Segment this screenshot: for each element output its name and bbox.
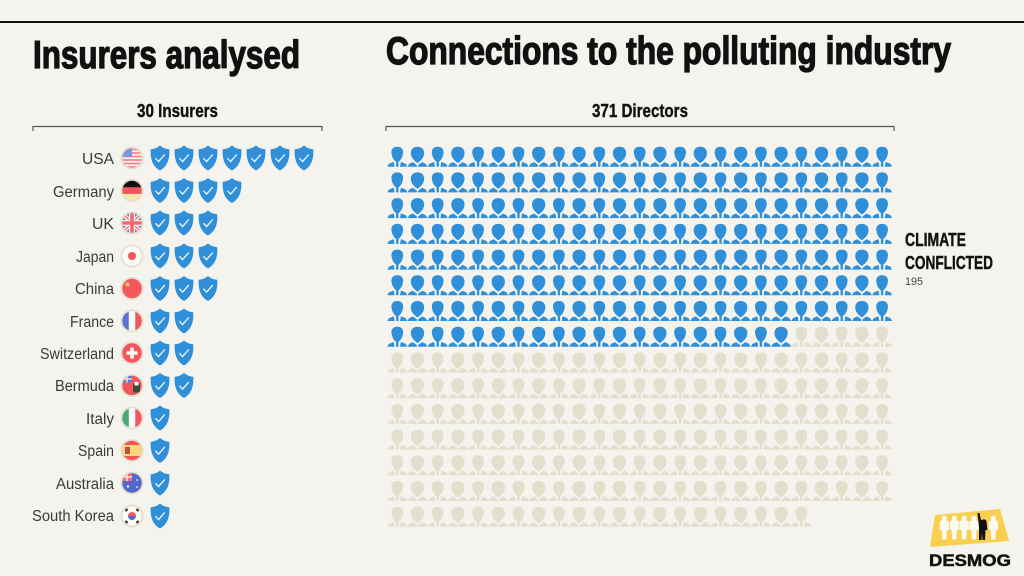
logo: Desmog [929,509,1011,570]
row: Germany [53,178,241,203]
heading: insurers analysed: Insurers analysed [33,34,300,77]
row: Germany: Germany [53,184,114,201]
row: South Korea: South Korea [32,508,114,525]
other directors [387,327,892,527]
panel: insurers by country [32,146,313,528]
row: UK [92,210,217,236]
chart: directors pictogram [387,147,892,527]
callout: climate conflicted: 195 [905,276,923,288]
callout: climate conflicted: CLIMATE [905,230,966,250]
row: Switzerland: Switzerland [40,346,114,363]
climate conflicted directors [387,147,892,347]
row: Spain [78,438,169,463]
row: Australia [56,470,169,496]
bracket: insurers [33,126,322,131]
row: USA: USA [82,151,115,168]
row: Bermuda [55,373,193,398]
row: Spain: Spain [78,443,114,460]
row: France: France [70,314,114,331]
row: USA [82,146,313,170]
row: Japan [76,244,217,268]
callout: climate conflicted: CONFLICTED [905,253,993,273]
row: Bermuda: Bermuda [55,378,114,395]
row: Italy: Italy [86,411,114,428]
callout: climate conflicted [905,230,993,288]
row: UK: UK [92,216,115,233]
row: Australia: Australia [56,476,114,493]
row: China [75,276,217,301]
row: Switzerland [40,340,193,366]
bracket: directors [386,126,894,131]
logo: Desmog: DESMOG [929,551,1011,570]
row: France [70,308,193,334]
row: Italy [86,406,169,430]
row: Japan: Japan [76,249,114,266]
row: China: China [75,281,114,298]
subheading: 30 insurers: 30 Insurers [137,100,218,121]
row: South Korea [32,504,169,528]
subheading: 371 directors: 371 Directors [592,100,688,121]
